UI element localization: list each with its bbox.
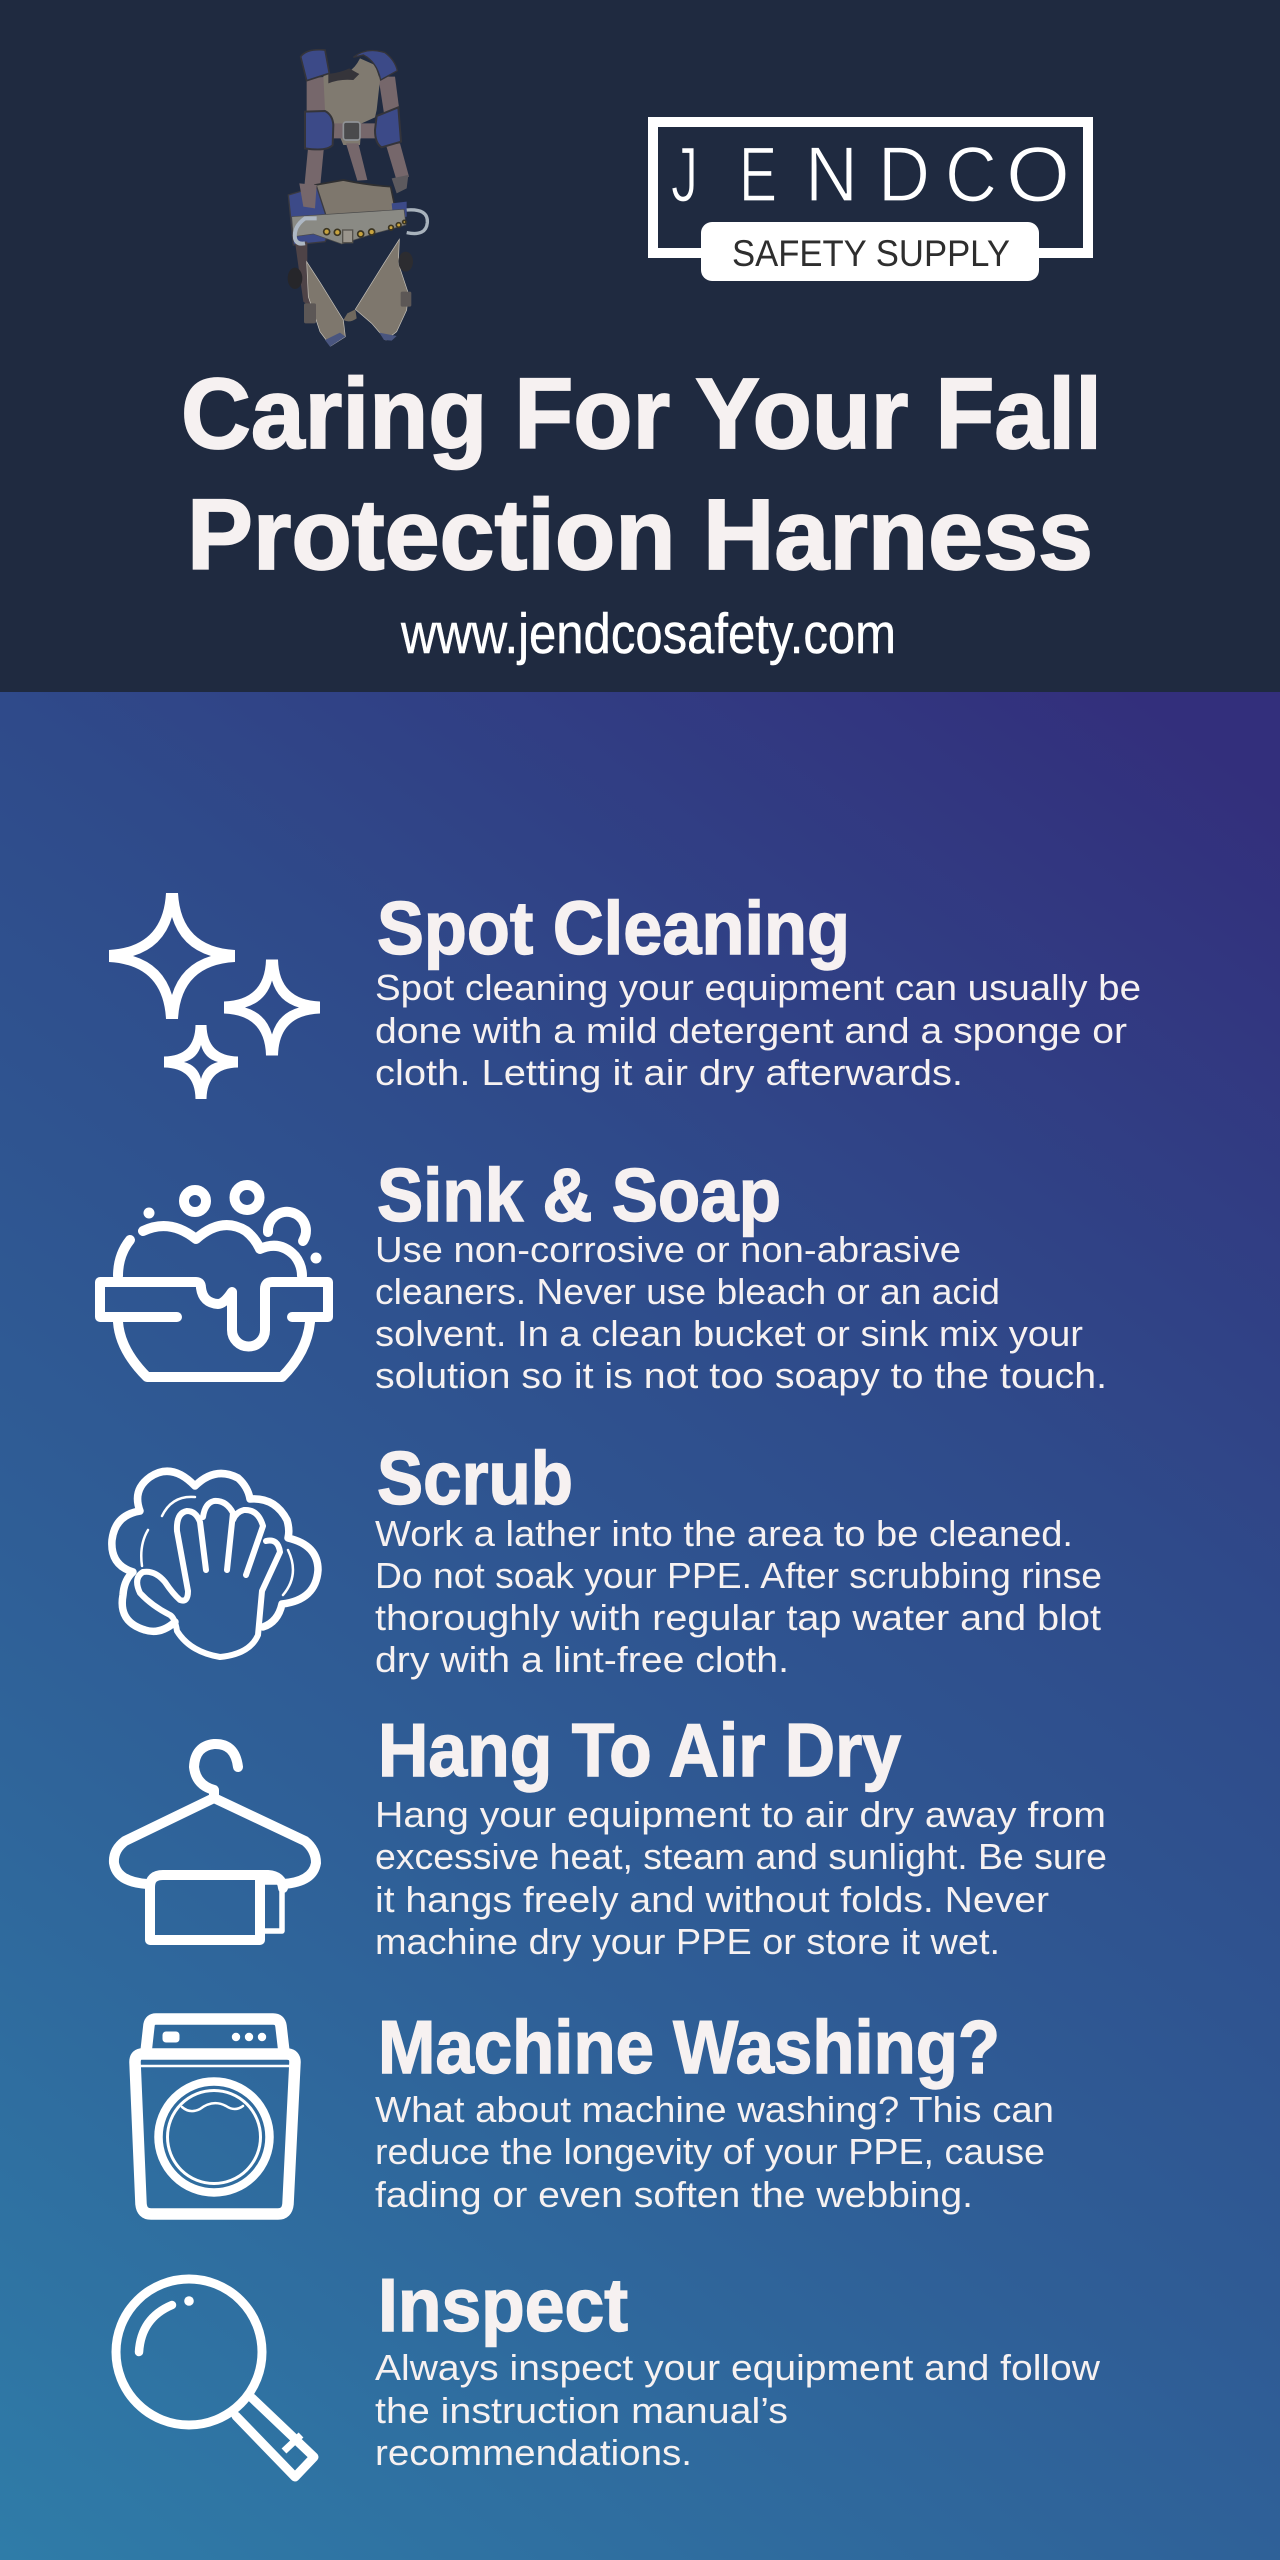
section: inspect (116, 2263, 1101, 2477)
section: hang to air dry (114, 1708, 1107, 1962)
icon: scrubbing hand (112, 1471, 318, 1657)
body text: recommendations. (375, 2432, 692, 2473)
logo wordmark: E (739, 130, 777, 218)
body text: thoroughly with regular tap water and blot (375, 1597, 1101, 1638)
body text (375, 2347, 1101, 2473)
body text: What about machine washing? This can (375, 2089, 1054, 2130)
section: sink and soap (100, 1153, 1107, 1396)
heading: Sink & Soap (377, 1153, 781, 1237)
section: spot cleaning (109, 886, 1141, 1099)
logo tagline: SAFETY SUPPLY (732, 233, 1010, 274)
logo (653, 122, 1088, 281)
gradient background panel (0, 692, 1280, 2560)
logo wordmark: N (805, 130, 858, 218)
body text: cleaners. Never use bleach or an acid (375, 1271, 1000, 1312)
body text: cloth. Letting it air dry afterwards. (375, 1052, 963, 1093)
body text (375, 2089, 1054, 2215)
body text: Hang your equipment to air dry away from (375, 1794, 1106, 1835)
body text: Always inspect your equipment and follow (375, 2347, 1101, 2388)
icon: hanger with towel (114, 1744, 316, 1940)
body text (375, 1794, 1107, 1962)
body text (375, 967, 1141, 1093)
logo wordmark: O (1006, 130, 1070, 218)
icon: washing machine (135, 2019, 295, 2214)
body text: reduce the longevity of your PPE, cause (375, 2131, 1045, 2172)
heading: Spot Cleaning (377, 886, 850, 970)
logo frame (653, 122, 1088, 253)
heading: Scrub (377, 1436, 573, 1520)
body text: it hangs freely and without folds. Never (375, 1879, 1049, 1920)
body text: Do not soak your PPE. After scrubbing rinse (375, 1555, 1102, 1596)
logo wordmark: J (671, 130, 698, 218)
body text (375, 1229, 1107, 1396)
title: Caring For Your Fall (181, 358, 1102, 470)
website url: www.jendcosafety.com (400, 602, 896, 666)
logo wordmark (671, 130, 1070, 218)
body text: solvent. In a clean bucket or sink mix your (375, 1313, 1083, 1354)
title: Protection Harness (187, 479, 1093, 591)
logo tagline pill (701, 222, 1039, 281)
body text: done with a mild detergent and a sponge or (375, 1010, 1127, 1051)
body text: solution so it is not too soapy to the touch. (375, 1355, 1107, 1396)
harness product image (288, 50, 427, 347)
body text: Spot cleaning your equipment can usually be (375, 967, 1141, 1008)
heading: Machine Washing? (378, 2005, 1000, 2089)
body text: fading or even soften the webbing. (375, 2174, 973, 2215)
section: machine washing (135, 2005, 1054, 2215)
body text: excessive heat, steam and sunlight. Be sure (375, 1836, 1107, 1877)
body text: dry with a lint-free cloth. (375, 1639, 789, 1680)
logo wordmark: C (945, 130, 997, 218)
title (181, 358, 1102, 591)
body text: Use non-corrosive or non-abrasive (375, 1229, 961, 1270)
heading: Inspect (378, 2263, 628, 2347)
section: scrub (112, 1436, 1102, 1680)
body text (375, 1513, 1102, 1680)
body text: machine dry your PPE or store it wet. (375, 1921, 1000, 1962)
body text: the instruction manual’s (375, 2390, 788, 2431)
header background (0, 0, 1280, 692)
heading: Hang To Air Dry (378, 1708, 901, 1792)
body text: Work a lather into the area to be cleaned. (375, 1513, 1073, 1554)
logo wordmark: D (878, 130, 930, 218)
header panel (0, 0, 1280, 692)
icon: soapy basin (100, 1185, 328, 1377)
icon: magnifying glass (116, 2279, 314, 2477)
icon: sparkles (109, 893, 320, 1099)
